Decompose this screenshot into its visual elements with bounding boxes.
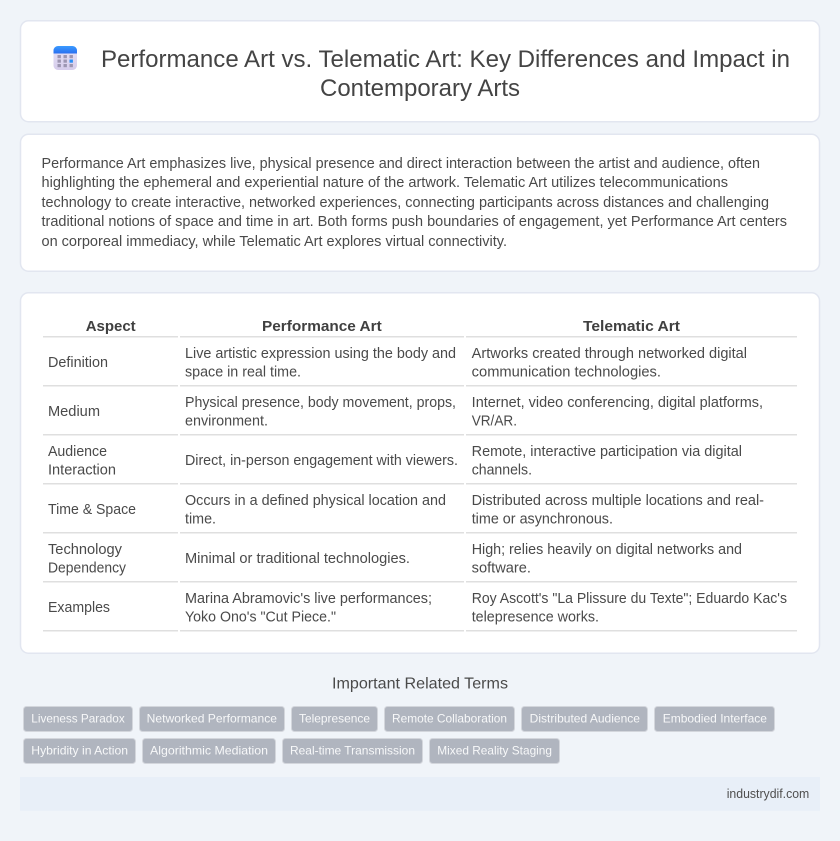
tag: Mixed Reality Staging [430, 738, 560, 764]
row: Medium: Physical presence, body movement, props, [185, 395, 456, 411]
row: Technology Dependency [43, 542, 797, 582]
row: Examples: Marina Abramovic's live performances; [185, 591, 432, 607]
tag: Networked Performance: Networked Performance [147, 712, 277, 726]
row: Medium [43, 395, 797, 436]
panel: comparison table [20, 293, 820, 653]
description text [42, 156, 787, 250]
title: Performance Art vs. Telematic Art: Key Differences and Impact in [101, 46, 790, 73]
row: Technology Dependency: software. [472, 560, 531, 576]
footer [20, 777, 820, 811]
description text: highlighting the ephemeral and experiential nature of the artwork. Telematic Art utilizes telecommunications [42, 175, 728, 191]
footer bar [20, 777, 820, 811]
row: Technology Dependency: Minimal or traditional technologies. [185, 551, 410, 567]
row: Time & Space: Distributed across multiple locations and real- [472, 493, 764, 509]
row: Technology Dependency: High; relies heavily on digital networks and [472, 542, 742, 558]
table header row: Performance Art [262, 318, 382, 335]
row: Definition: Artworks created through networked digital [472, 346, 747, 362]
tag: Hybridity in Action [24, 738, 136, 764]
title: Contemporary Arts [320, 75, 520, 102]
tag: Liveness Paradox: Liveness Paradox [31, 712, 125, 726]
row: Medium: environment. [185, 414, 268, 430]
row: Time & Space: Occurs in a defined physical location and [185, 493, 446, 509]
row: Definition: communication technologies. [472, 364, 661, 380]
row: Audience Interaction: Direct, in-person engagement with viewers. [185, 453, 458, 469]
heading: related terms: Important Related Terms [332, 676, 508, 692]
tag: Hybridity in Action: Hybridity in Action [31, 744, 128, 758]
tag: Liveness Paradox [24, 706, 132, 732]
tag: Embodied Interface [654, 706, 774, 732]
row: Examples [43, 591, 797, 632]
row: Definition: Live artistic expression using the body and [185, 346, 456, 362]
row: Examples: Roy Ascott's "La Plissure du Texte"; Eduardo Kac's [472, 591, 787, 607]
row: Examples: Yoko Ono's "Cut Piece." [185, 610, 336, 626]
row: Time & Space [43, 493, 797, 534]
row: Time & Space: Time & Space [48, 502, 136, 518]
row: Medium: VR/AR. [472, 414, 517, 430]
related term tags [24, 706, 774, 764]
row: Definition: Definition [48, 355, 108, 371]
tag: Algorithmic Mediation: Algorithmic Mediation [150, 744, 268, 758]
panel: header [20, 21, 820, 122]
header card background [20, 21, 820, 122]
tag: Distributed Audience [522, 706, 648, 732]
row: Medium: Internet, video conferencing, digital platforms, [472, 395, 763, 411]
tag: Distributed Audience: Distributed Audience [530, 712, 640, 726]
row: Audience Interaction: Interaction [48, 462, 116, 478]
table card background [20, 293, 820, 653]
tag: Telepresence [292, 706, 378, 732]
row: Technology Dependency: Technology [48, 542, 123, 558]
description text: on corporeal immediacy, while Telematic Art explores virtual connectivity. [42, 234, 507, 250]
row: Audience Interaction [43, 444, 797, 484]
tag: Networked Performance [140, 706, 284, 732]
description text: traditional notions of space and time in art. Both forms push boundaries of engagement, yet Performance Art centers [42, 214, 787, 230]
description card background [20, 134, 820, 271]
description text: Performance Art emphasizes live, physical presence and direct interaction between the artist and audience, often [42, 156, 760, 172]
row: Audience Interaction: Audience [48, 444, 107, 460]
tag: Telepresence: Telepresence [299, 712, 370, 726]
icon: calendar [54, 46, 77, 70]
row: Examples: telepresence works. [472, 610, 599, 626]
tag: Algorithmic Mediation [142, 738, 276, 764]
table header row: Telematic Art [583, 318, 680, 335]
row: Audience Interaction: Remote, interactive participation via digital [472, 444, 742, 460]
row: Time & Space: time. [185, 512, 216, 528]
row: Audience Interaction: channels. [472, 462, 532, 478]
tag: Remote Collaboration [384, 706, 514, 732]
table header row: Aspect [86, 318, 136, 335]
panel: description [20, 134, 820, 271]
title [101, 46, 790, 102]
row: Definition [43, 346, 797, 386]
row: Definition: space in real time. [185, 364, 301, 380]
tag: Real-time Transmission [282, 738, 422, 764]
tag: Mixed Reality Staging: Mixed Reality Staging [437, 744, 552, 758]
row: Examples: Examples [48, 600, 110, 616]
row: Time & Space: time or asynchronous. [472, 512, 613, 528]
table header row [43, 318, 797, 338]
row: Medium: Medium [48, 404, 100, 420]
tag: Remote Collaboration: Remote Collaboration [392, 712, 507, 726]
tag: Real-time Transmission: Real-time Transmission [290, 744, 415, 758]
tag: Embodied Interface: Embodied Interface [663, 712, 767, 726]
footer site name: industrydif.com [727, 786, 809, 801]
row: Technology Dependency: Dependency [48, 560, 127, 576]
description text: technology to create interactive, networked experiences, connecting participants across distances and challenging [42, 195, 769, 211]
